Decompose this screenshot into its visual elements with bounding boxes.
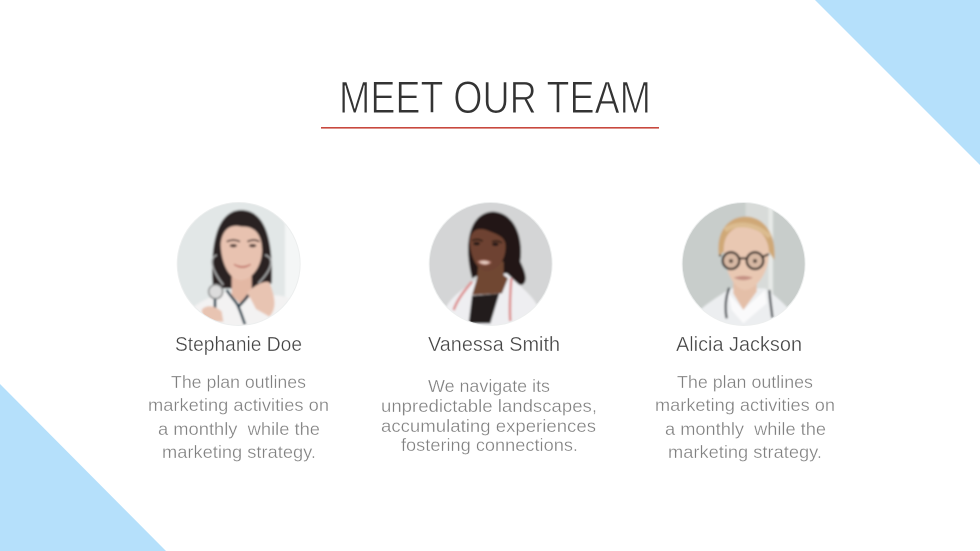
description: Stephanie Doe: a monthly while the: [158, 419, 320, 439]
description: Vanessa Smith: fostering connections.: [401, 435, 578, 455]
description: Alicia Jackson: marketing strategy.: [668, 442, 822, 462]
corner triangle: top right: [815, 0, 980, 165]
description: Alicia Jackson: marketing activities on: [655, 395, 835, 415]
team member: Vanessa Smith: [381, 195, 597, 455]
name: Vanessa Smith: Vanessa Smith: [428, 334, 560, 356]
description: Alicia Jackson: The plan outlines: [677, 372, 813, 392]
team member: Stephanie Doe: [148, 195, 329, 462]
title underline: [321, 127, 659, 129]
portrait: Alicia Jackson: [682, 202, 806, 326]
description: Stephanie Doe: [148, 372, 329, 462]
team member: Alicia Jackson: [655, 195, 835, 462]
description: Alicia Jackson: a monthly while the: [665, 419, 826, 439]
description: Stephanie Doe: marketing strategy.: [162, 442, 316, 462]
description: Stephanie Doe: marketing activities on: [148, 395, 329, 415]
name: Alicia Jackson: Alicia Jackson: [676, 334, 802, 356]
description: Vanessa Smith: [381, 376, 597, 455]
description: Vanessa Smith: unpredictable landscapes,: [381, 396, 597, 416]
description: Vanessa Smith: We navigate its: [428, 376, 550, 396]
title: MEET OUR TEAM: [339, 72, 651, 123]
description: Vanessa Smith: accumulating experiences: [381, 416, 596, 436]
name: Stephanie Doe: Stephanie Doe: [175, 334, 302, 356]
portrait: Stephanie Doe: [176, 202, 300, 326]
portrait: Vanessa Smith: [428, 202, 552, 326]
corner triangle: bottom left: [0, 384, 166, 551]
description: Stephanie Doe: The plan outlines: [171, 372, 306, 392]
description: Alicia Jackson: [655, 372, 835, 462]
